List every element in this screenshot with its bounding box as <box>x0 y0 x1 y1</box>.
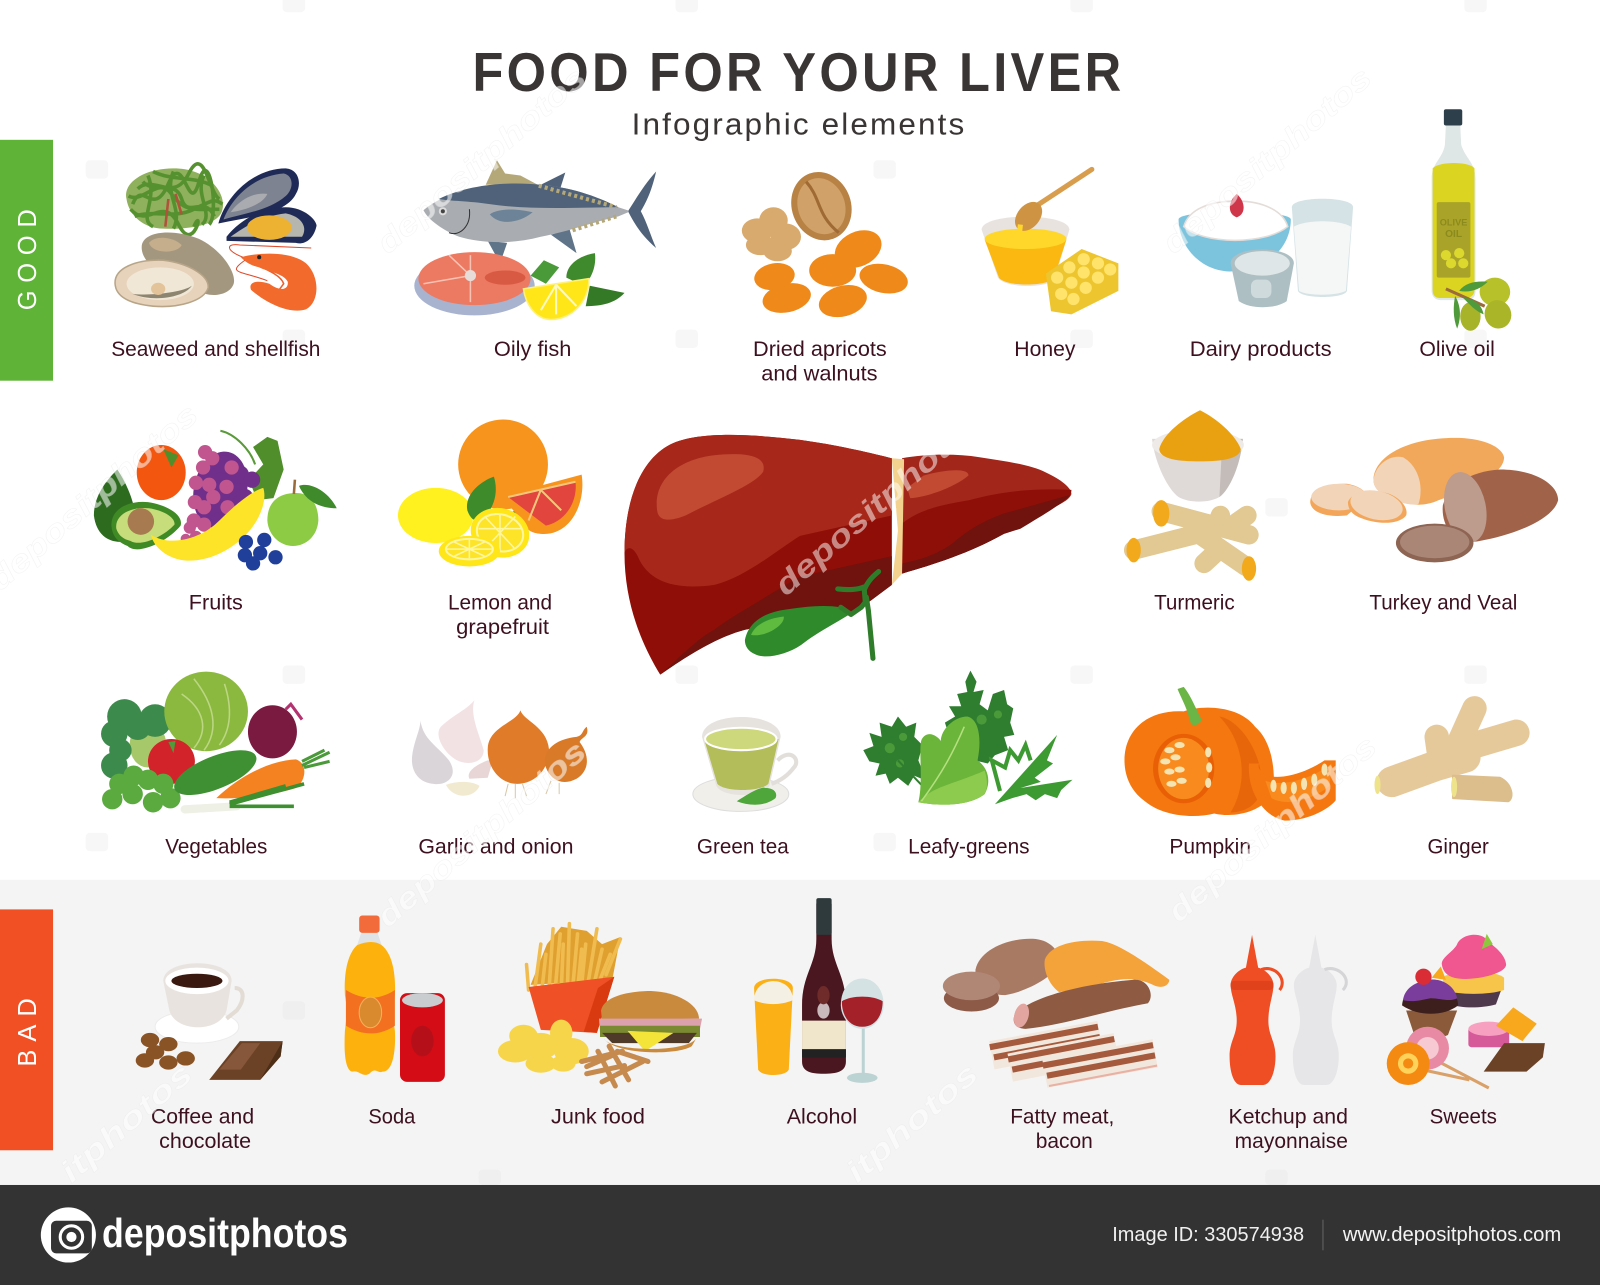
food item: ginger <box>1374 708 1516 858</box>
food item: turkey and veal <box>1310 438 1558 614</box>
footer bar <box>0 1185 1600 1285</box>
label: Turkey and Veal <box>1369 590 1517 614</box>
watermarks: depositphotos <box>768 403 991 602</box>
label: Dried apricots <box>753 337 887 361</box>
food item: fruits <box>94 431 337 614</box>
food item: junk food <box>498 924 702 1129</box>
label: Leafy-greens <box>908 834 1030 858</box>
food item: fatty meat and bacon <box>943 939 1169 1153</box>
liver left lobe <box>624 435 892 675</box>
food item: pumpkin <box>1124 687 1336 858</box>
watermarks: depositphotos <box>370 61 593 260</box>
watermarks: itphotos <box>839 1056 985 1189</box>
panel: bad label: BAD <box>14 998 42 1067</box>
label: Oily fish <box>494 337 571 361</box>
label: Pumpkin <box>1169 834 1251 858</box>
label: Green tea <box>697 834 789 858</box>
watermarks: depositphotos <box>1156 61 1378 260</box>
label: Soda <box>368 1105 415 1129</box>
label: chocolate <box>159 1129 251 1153</box>
label: Lemon and <box>448 590 552 614</box>
label: Coffee and <box>151 1105 254 1129</box>
label: Ginger <box>1428 834 1489 858</box>
food item: olive oil <box>1419 109 1515 361</box>
label: Junk food <box>551 1105 645 1129</box>
label: Olive oil <box>1419 337 1495 361</box>
panel: good label <box>0 140 53 381</box>
label: Turmeric <box>1154 590 1235 614</box>
image id: Image ID: 330574938 <box>1112 1224 1304 1246</box>
label: Fruits <box>189 590 243 614</box>
label: mayonnaise <box>1235 1129 1348 1153</box>
food item: soda <box>345 916 445 1129</box>
watermarks: depositphotos <box>370 734 593 934</box>
food item: dried apricots and walnuts <box>742 163 911 386</box>
label: Seaweed and shellfish <box>111 337 320 361</box>
label: and walnuts <box>761 362 878 386</box>
label: Ketchup and <box>1229 1105 1348 1129</box>
website: www.depositphotos.com <box>1342 1224 1561 1246</box>
subtitle: Infographic elements <box>632 108 966 142</box>
food item: alcohol <box>754 898 884 1129</box>
watermarks: depositphotos <box>1161 729 1383 929</box>
food item: seaweed and shellfish <box>111 164 320 361</box>
label: Vegetables <box>165 834 267 858</box>
label: Garlic and onion <box>418 834 573 858</box>
watermarks <box>0 61 1383 1189</box>
watermarks: itphotos <box>54 1056 199 1189</box>
panel: bad label <box>0 909 53 1150</box>
ligament <box>892 458 904 585</box>
icon: camera logo <box>41 1207 96 1263</box>
food item: lemon and grapefruit <box>398 419 582 639</box>
brand name: depositphotos <box>102 1210 348 1256</box>
food item: dairy products <box>1179 194 1353 361</box>
food item: green tea <box>693 717 796 858</box>
food item: honey <box>982 169 1118 361</box>
food item: turmeric <box>1127 410 1256 614</box>
food item: oily fish <box>414 160 656 361</box>
label: bacon <box>1036 1129 1093 1153</box>
label: Dairy products <box>1190 337 1332 361</box>
illustration: liver and gallbladder <box>624 435 1071 675</box>
liver right lobe <box>902 455 1071 574</box>
food item: coffee and chocolate <box>136 963 283 1153</box>
food item: sweets <box>1387 934 1545 1129</box>
food item: olive oil: OLIVE <box>1440 218 1467 228</box>
panel: good label: GOOD <box>14 209 42 310</box>
label: Alcohol <box>787 1105 857 1129</box>
food item: leafy greens <box>863 671 1072 858</box>
food item: garlic and onion <box>412 700 587 858</box>
label: Honey <box>1014 337 1076 361</box>
title: FOOD FOR YOUR LIVER <box>472 41 1124 103</box>
gallbladder <box>745 606 851 656</box>
food item: vegetables <box>101 672 330 858</box>
bile duct <box>838 572 879 658</box>
label: Sweets <box>1430 1105 1497 1129</box>
label: Fatty meat, <box>1010 1105 1114 1129</box>
label: grapefruit <box>456 615 549 639</box>
food item: olive oil: OIL <box>1445 229 1462 240</box>
food item: ketchup and mayonnaise <box>1229 935 1348 1153</box>
